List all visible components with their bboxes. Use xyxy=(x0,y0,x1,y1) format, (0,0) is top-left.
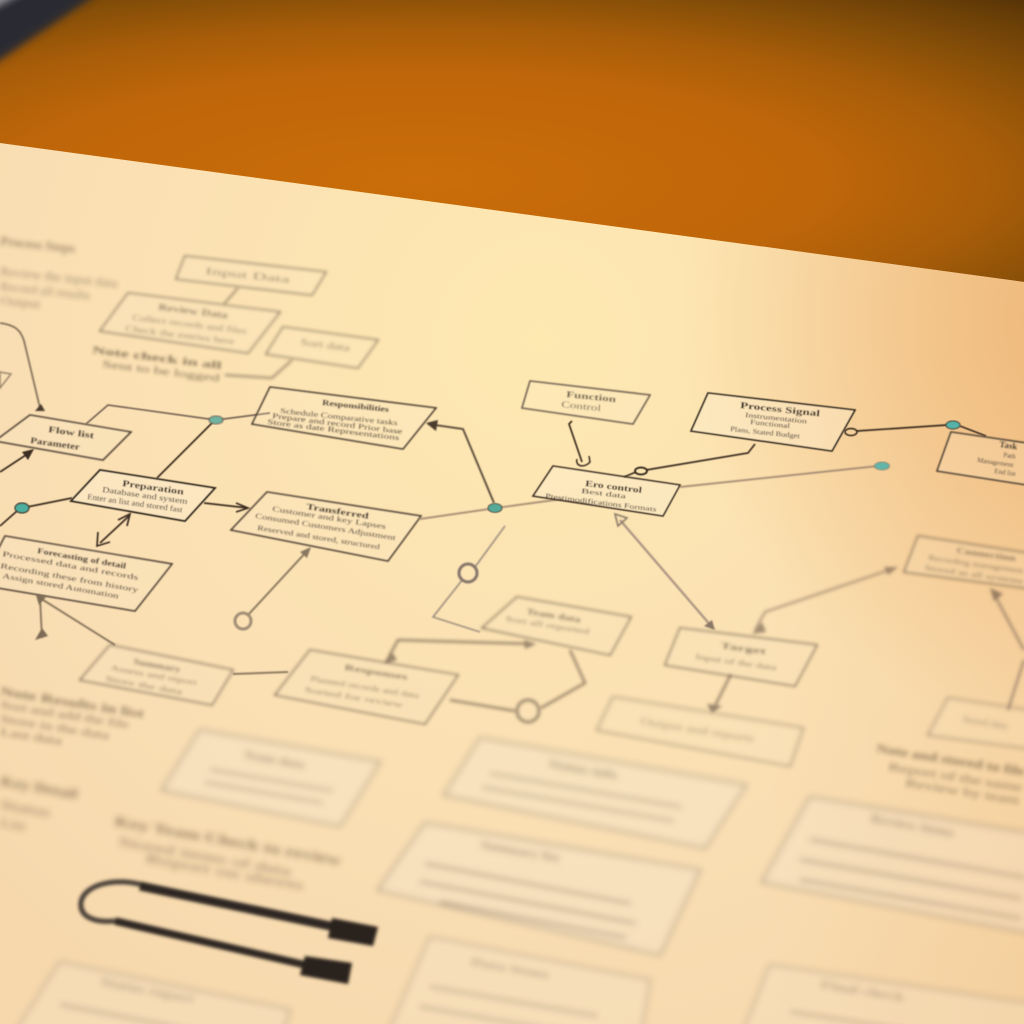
box: Responsibilities: Schedule Comparative tasks xyxy=(280,406,398,427)
note: lower left text xyxy=(0,773,79,833)
box: Responsibilities: Store as date Representations xyxy=(267,417,400,442)
box: Transfer: Transferred xyxy=(306,501,370,521)
box: Core control: Best data xyxy=(581,487,628,501)
note: right: Note and stored to file xyxy=(876,741,1024,779)
box: Responsibilities xyxy=(252,387,436,449)
box: second blurred box: Collect records and files xyxy=(132,312,248,336)
box: left lower detail: Assign stored Automation xyxy=(2,571,120,601)
box: Responsibilities: Responsibilities xyxy=(322,398,389,414)
box: Core control: Ptestimodifications Formats xyxy=(545,492,657,514)
node: teal centre xyxy=(488,504,502,512)
box: middle box: Sort all reported xyxy=(505,614,590,636)
box: small blurred box: Sort data xyxy=(300,337,351,354)
box: lower centre: Input of the data xyxy=(695,652,778,672)
box: T xyxy=(162,730,380,826)
box: Transfer: Reserved and stored, structured xyxy=(257,523,381,551)
box: W: Review items xyxy=(869,811,956,840)
note: left xyxy=(0,684,145,748)
box: right lower xyxy=(904,536,1024,590)
note: left: Store in the data xyxy=(0,713,110,742)
box: Flow list, left: Flow list xyxy=(48,424,95,440)
box: Transfer: Consumed Customers Adjustment xyxy=(255,511,398,542)
note: right xyxy=(876,741,1024,807)
dark object in top-left corner xyxy=(0,0,118,70)
note: left: Last data xyxy=(0,726,63,748)
box: focused left box: Enter an list and stored fast xyxy=(87,492,184,514)
box: lower mid flow: Planned records and data xyxy=(310,674,420,700)
note text under second box: Note check in all xyxy=(92,345,222,372)
box: Responsibilities: Prepare and record Prior base xyxy=(272,411,404,436)
box: R: Output and reports xyxy=(640,716,755,745)
box: lower centre: Target xyxy=(720,640,767,656)
box: W xyxy=(762,797,1024,935)
box: focused left box: Database and system xyxy=(102,485,189,506)
box: lower left flow: Assess and report xyxy=(110,663,199,687)
box: Process signal xyxy=(691,393,855,451)
box: right lower: Connection xyxy=(956,545,1017,563)
box: V xyxy=(378,823,700,955)
connectors mid row xyxy=(384,567,1024,722)
note: left: Sort and add the file xyxy=(0,699,130,731)
note: lower left text: Key Detail xyxy=(0,773,79,802)
box: Z xyxy=(740,965,1024,1024)
box: second blurred box: Review Data xyxy=(158,302,228,322)
upper-left flowchart group xyxy=(92,256,378,384)
box: Process control xyxy=(522,381,650,424)
box: top blurred box xyxy=(176,256,326,295)
box: Process signal: Process Signal xyxy=(740,400,821,418)
box: S: Stored data xyxy=(962,714,1009,732)
box: small blurred box xyxy=(266,327,378,368)
note: lower centre-left text xyxy=(113,813,343,893)
middle-row blurred flowchart xyxy=(80,536,1024,724)
box: lower mid flow: Responses xyxy=(344,662,409,682)
box: left lower detail: Recording these from history xyxy=(0,561,139,594)
note: lower left text: Status xyxy=(0,797,52,820)
box: left lower detail: Forecasting of detail xyxy=(37,546,128,571)
box: Process control: Function xyxy=(566,389,617,404)
blurred notes, top-left: Process Steps xyxy=(0,233,76,256)
box: Process signal: Plans, Stated Budget xyxy=(730,425,800,440)
box: lower mid flow: Sorted for review xyxy=(304,685,404,710)
box: middle box xyxy=(482,597,631,655)
box: Transfer xyxy=(231,492,421,561)
box: right lower: Recording management xyxy=(928,553,1024,575)
box: Task, right edge: Management xyxy=(977,456,1014,469)
focused-centre connectors xyxy=(420,420,878,632)
box: Core control: Ero control xyxy=(585,478,643,495)
box: lower left flow: Summary xyxy=(133,656,182,674)
box: lower left flow: Store the data xyxy=(105,674,184,697)
note: lower centre-left text: Stored items of data xyxy=(117,834,293,879)
box: second blurred box: Check the entries here xyxy=(125,323,235,346)
box: U: Status info xyxy=(547,756,619,782)
node: teal left upper xyxy=(209,416,223,424)
box: X: Data items xyxy=(469,954,551,982)
box: Y: Status report xyxy=(99,974,195,1006)
note: lower centre-left text: Key Team Check to review xyxy=(113,813,343,868)
box: focused left box xyxy=(71,470,215,521)
note: lower centre-left text: Report on sheets xyxy=(144,851,305,893)
lower blurred row xyxy=(0,684,1024,807)
box: Task, right edge: Path xyxy=(1003,451,1017,461)
bottom edge blurred boxes xyxy=(10,937,1024,1024)
box: lower centre xyxy=(665,628,817,686)
note: right: Review by team xyxy=(905,777,1021,807)
box: left lower detail: Processed data and records xyxy=(2,549,139,582)
note: right: Report of the same xyxy=(888,761,1023,794)
cable with two connectors xyxy=(81,882,378,984)
box: Task, right edge: End list xyxy=(994,467,1016,478)
box: V: Summary list xyxy=(479,837,561,865)
node: teal left xyxy=(15,503,29,513)
box: middle box: Team data xyxy=(526,606,582,625)
note: left: Note Results in list xyxy=(0,684,145,721)
box: Task, right edge xyxy=(937,432,1024,487)
box: Process signal: Instrumentation xyxy=(745,411,808,426)
box: left lower detail xyxy=(0,536,172,611)
node: teal upper right xyxy=(946,421,960,429)
box: Flow list, left xyxy=(0,415,131,460)
box: top blurred box: Input Data xyxy=(205,266,291,286)
box: U xyxy=(444,738,746,848)
desk background xyxy=(0,0,1024,300)
box: Y xyxy=(10,962,290,1024)
box: right lower: Stored as all systems xyxy=(924,563,1024,586)
box: lower left flow xyxy=(80,645,233,705)
box: Process control: Control xyxy=(561,399,602,413)
box: Z: Final check xyxy=(820,977,906,1004)
blurred notes, top-left: Review the input data xyxy=(0,264,119,290)
box: X xyxy=(385,937,650,1024)
blurred notes, top-left: Output xyxy=(0,293,42,311)
box: Core control xyxy=(533,466,680,516)
blurred boxes near the bottom xyxy=(0,730,1024,955)
box: Task, right edge: Task xyxy=(999,439,1018,452)
node: teal right xyxy=(874,462,890,470)
box: R xyxy=(597,697,803,766)
box: Process signal: Functional xyxy=(750,418,790,430)
box: focused left box: Preparation xyxy=(122,478,185,497)
note: lower left text: List xyxy=(0,815,27,833)
box: lower mid flow xyxy=(275,650,458,724)
left margin connector lines xyxy=(0,323,45,411)
upper-left flowchart group: Sent to be logged xyxy=(102,359,220,384)
connectors, lower left xyxy=(35,547,311,674)
box: second blurred box xyxy=(100,293,280,353)
blurred notes, top-left: Record all results xyxy=(0,279,91,302)
box: Flow list, left: Parameter xyxy=(30,435,81,452)
blurred notes, top-left xyxy=(0,233,119,311)
box: Transfer: Customer and key Lapses xyxy=(272,504,387,531)
connectors around focused left box xyxy=(0,405,270,546)
box: T: Team data xyxy=(242,747,306,772)
box: S xyxy=(928,698,1024,750)
